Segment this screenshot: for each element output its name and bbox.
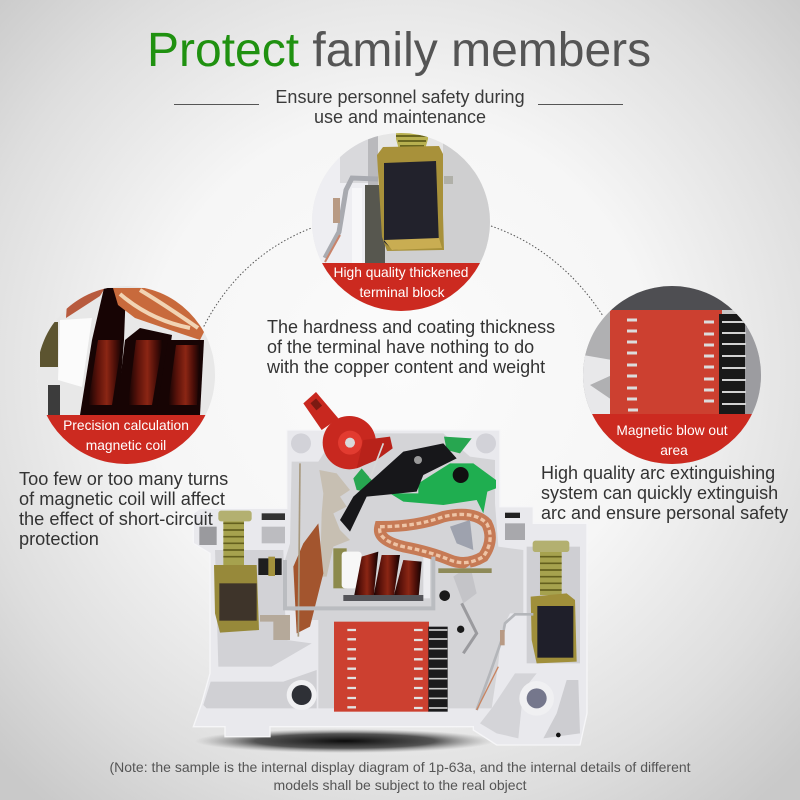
footnote: models shall be subject to the real object bbox=[274, 777, 526, 793]
coil bbox=[333, 548, 347, 588]
text: terminal note: of the terminal have nothing to do bbox=[267, 337, 534, 357]
circle label: magnetic coil: magnetic coil bbox=[86, 438, 166, 453]
copper braid bbox=[380, 514, 490, 563]
subtitle rule right bbox=[538, 104, 623, 105]
red handle bbox=[303, 392, 338, 430]
subtitle: Ensure personnel safety during bbox=[275, 87, 525, 107]
circle: blow out area bbox=[583, 286, 763, 464]
text: terminal note: with the copper content and weight bbox=[267, 357, 545, 377]
beige latch bbox=[319, 470, 350, 577]
mounting holes bbox=[291, 433, 311, 453]
text: coil note: protection bbox=[19, 529, 99, 549]
main cavity bbox=[285, 433, 523, 708]
text: arc note: arc and ensure personal safety bbox=[541, 503, 788, 523]
text: arc note: High quality arc extinguishing bbox=[541, 463, 775, 483]
circle label: blow out area: Magnetic blow out bbox=[616, 423, 728, 438]
text: coil note bbox=[19, 469, 228, 549]
circle: terminal block bbox=[312, 133, 493, 313]
subtitle bbox=[275, 87, 525, 127]
text: arc note: system can quickly extinguish bbox=[541, 483, 778, 503]
circle label: blow out area: area bbox=[660, 443, 688, 458]
connector: top to right circle bbox=[491, 226, 603, 316]
text: terminal note bbox=[267, 317, 555, 377]
left terminal room bbox=[215, 550, 312, 667]
moving contact bbox=[453, 565, 477, 603]
text: coil note: the effect of short-circuit bbox=[19, 509, 213, 529]
breaker device bbox=[193, 392, 587, 745]
footnote bbox=[109, 759, 691, 793]
text: coil note: of magnetic coil will affect bbox=[19, 489, 225, 509]
circle label: terminal block bbox=[334, 265, 468, 300]
circle label: magnetic coil bbox=[63, 418, 189, 453]
circle label: terminal block: terminal block bbox=[359, 285, 445, 300]
circle: magnetic coil bbox=[37, 286, 215, 465]
right terminal room bbox=[527, 547, 580, 663]
text: coil note: Too few or too many turns bbox=[19, 469, 228, 489]
housing bbox=[193, 430, 587, 745]
black lever bbox=[340, 443, 457, 532]
right terminal bbox=[540, 552, 562, 595]
connector: top to left circle bbox=[203, 227, 314, 328]
copper wire left bbox=[293, 523, 323, 633]
lower left room bbox=[203, 670, 317, 708]
subtitle rule left bbox=[174, 104, 259, 105]
steel frame bbox=[285, 557, 433, 608]
arc chute bbox=[334, 622, 429, 712]
subtitle: use and maintenance bbox=[314, 107, 486, 127]
circle label: magnetic coil: Precision calculation bbox=[63, 418, 189, 433]
left terminal bbox=[223, 518, 244, 565]
lower right rooms bbox=[543, 680, 580, 738]
floor shadow bbox=[195, 729, 495, 753]
footnote: (Note: the sample is the internal display diagram of 1p-63a, and the internal details of different bbox=[109, 759, 691, 775]
circle label: blow out area bbox=[616, 423, 728, 458]
circle label: terminal block: High quality thickened bbox=[334, 265, 468, 280]
text: terminal note: The hardness and coating thickness bbox=[267, 317, 555, 337]
text: arc note bbox=[541, 463, 788, 523]
green lever bbox=[353, 468, 372, 492]
title: Protect family members bbox=[147, 24, 651, 77]
